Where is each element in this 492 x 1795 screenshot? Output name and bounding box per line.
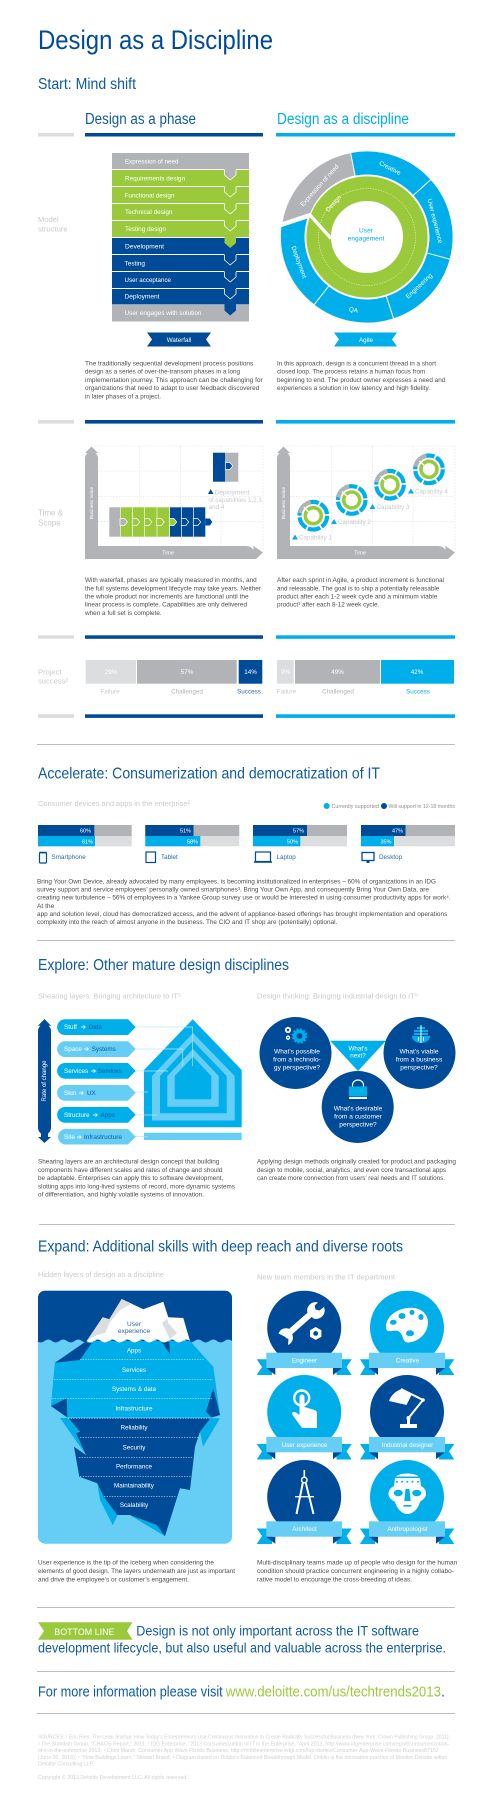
rate of change arrow bbox=[38, 1019, 51, 1143]
copyright: Copyright © 2013 Deloitte Development LLC. All rights reserved. bbox=[38, 1774, 188, 1781]
text: design thinking description bbox=[257, 1159, 456, 1182]
agile donut diagram bbox=[280, 151, 453, 323]
badge: user experience: User experience bbox=[282, 1442, 328, 1449]
rate of change arrow: Rate of change bbox=[41, 1060, 48, 1102]
iceberg panel: Maintainability bbox=[114, 1482, 155, 1490]
sources: SOURCES: ¹ Eric Ries, The Lean Startup: How Today's Entrepreneurs Use Continuous Innovation to Create Radically Successful Business (New York: Crown Publishing Group, 2011); bbox=[38, 1735, 450, 1741]
icon: smartphone bbox=[40, 852, 46, 863]
waterfall diagram bbox=[112, 153, 249, 322]
bar chart: desktop bbox=[361, 825, 455, 846]
call to action: For more information please visit bbox=[38, 1685, 223, 1701]
waterfall diagram: User acceptance bbox=[124, 277, 171, 284]
badge: industrial designer bbox=[360, 1375, 454, 1460]
badge: creative bbox=[360, 1291, 454, 1375]
text: waterfall description bbox=[85, 360, 263, 400]
chart: waterfall time and scope bbox=[85, 446, 264, 559]
agile donut diagram: Deployment bbox=[289, 245, 308, 279]
ribbon: waterfall bbox=[147, 332, 211, 346]
subheading: hidden layers: Hidden layers of design as a discipline bbox=[38, 1270, 164, 1279]
waterfall diagram: Deployment bbox=[124, 294, 160, 300]
layer tag: skin to ux bbox=[57, 1085, 136, 1101]
divider bars bbox=[38, 635, 455, 639]
text: design thinking description: design to mobile, social, analytics, and even core transactional apps bbox=[257, 1167, 447, 1174]
icon: desk lamp bbox=[389, 1389, 425, 1428]
layer tag: services to services bbox=[57, 1063, 136, 1079]
ribbon: agile bbox=[334, 332, 397, 346]
label: desktop: Desktop bbox=[379, 854, 403, 861]
text: consumerization paragraph: complexity into the reach of almost anyone in the business. The CIO and IT shop are (potentially) optional. bbox=[37, 919, 337, 926]
text: teams description bbox=[257, 1560, 458, 1583]
layer tag: structure to apps: Apps bbox=[100, 1112, 115, 1119]
text: waterfall description: design as a series of over-the-transom phases in a long bbox=[85, 369, 240, 376]
title: Design as a Discipline bbox=[38, 25, 273, 55]
chart: agile time and scope: Business value bbox=[281, 487, 287, 519]
bar chart: agile project success: Challenged bbox=[322, 688, 354, 696]
text: waterfall timing description: when a full set is complete. bbox=[84, 610, 162, 617]
bottom line ribbon bbox=[38, 1622, 132, 1640]
chart: agile time and scope: Capability 2 bbox=[338, 519, 371, 526]
iceberg panel: Performance bbox=[116, 1463, 153, 1470]
design thinking diagram bbox=[260, 1017, 456, 1143]
bar chart: smartphone bbox=[38, 825, 132, 846]
text: shearing layers description: of differentiation, and highly volatile systems of innovation. bbox=[38, 1192, 204, 1199]
bar chart: agile project success: 9% bbox=[281, 669, 290, 676]
circle: business perspective: What's viable bbox=[399, 1048, 439, 1056]
layer tag: stuff to data bbox=[57, 1019, 136, 1035]
icon: drafting compass bbox=[295, 1470, 314, 1514]
bar chart: smartphone: 60% bbox=[80, 828, 91, 834]
circle: technology perspective: gy perspective? bbox=[274, 1064, 320, 1072]
badge: user experience bbox=[257, 1375, 352, 1460]
section heading: start: Start: Mind shift bbox=[38, 76, 136, 93]
layer tag: skin to ux: UX bbox=[87, 1090, 97, 1097]
waterfall diagram: Testing design bbox=[125, 226, 166, 233]
agile donut diagram: Expression of need bbox=[299, 163, 341, 208]
section heading: explore: Explore: Other mature design disciplines bbox=[38, 957, 289, 974]
agile donut diagram: Design bbox=[325, 194, 343, 213]
text: agile description bbox=[277, 360, 446, 392]
bar chart: desktop: 35% bbox=[380, 839, 392, 845]
text: consumerization paragraph: At the bbox=[37, 903, 55, 910]
iceberg panel: Reliability bbox=[121, 1425, 148, 1432]
layer tag: structure to apps bbox=[57, 1107, 136, 1123]
bar chart: tablet: 51% bbox=[180, 828, 191, 834]
row label: project success: Project bbox=[38, 668, 63, 676]
text: agile description: beginning to end. The product owner expresses a need and bbox=[277, 377, 446, 384]
circle: business perspective: perspective? bbox=[400, 1064, 438, 1072]
iceberg panel: Services bbox=[122, 1367, 146, 1374]
badge: anthropologist bbox=[360, 1460, 454, 1544]
icon: desktop bbox=[362, 852, 374, 863]
triangle: what's next: next? bbox=[350, 1052, 366, 1060]
text: waterfall description: in later phases of a project. bbox=[85, 394, 161, 400]
text: design thinking description: can create more connection from users’ real needs and IT solutions. bbox=[257, 1175, 445, 1182]
bar chart: smartphone: 61% bbox=[82, 839, 93, 845]
chart: waterfall time and scope: Time bbox=[162, 551, 174, 557]
text: design thinking description: Applying design methods originally created for product and packaging bbox=[257, 1159, 456, 1166]
bar chart: desktop: 47% bbox=[392, 828, 403, 834]
text: consumerization paragraph bbox=[37, 878, 451, 926]
layer tag: space to systems bbox=[57, 1041, 136, 1057]
waterfall diagram: Functional design bbox=[124, 192, 175, 200]
section heading: accelerate: Accelerate: Consumerization and democratization of IT bbox=[38, 766, 380, 783]
text: iceberg description: and drive the employee’s or customer’s engagement. bbox=[38, 1576, 189, 1583]
circle: customer perspective bbox=[322, 1071, 394, 1143]
text: waterfall timing description: the full systems development lifecycle may take years. Neither bbox=[85, 585, 262, 592]
agile donut diagram: User experience bbox=[426, 198, 444, 245]
badge: architect bbox=[257, 1460, 352, 1544]
row label: time and scope: Time & bbox=[38, 508, 64, 518]
text: agile timing description: After each sprint in Agile, a product increment is functional bbox=[277, 577, 445, 584]
text: waterfall description: implementation journey. This approach can be challenging for bbox=[85, 377, 263, 384]
bar chart: waterfall project success: Success bbox=[237, 688, 261, 696]
text: waterfall description: organizations that need to adapt to user feedback discovered bbox=[85, 385, 260, 392]
bar chart: agile project success bbox=[277, 660, 454, 696]
icon: laptop bbox=[254, 852, 272, 863]
bar chart: laptop bbox=[253, 825, 347, 846]
text: consumerization paragraph: creating new turbulence – 56% of employees in a Yankee Group survey use or would be interested in using consumer productivity apps for work⁴. bbox=[37, 895, 451, 902]
circle: customer perspective: perspective? bbox=[339, 1122, 377, 1129]
call to action bbox=[38, 1685, 445, 1701]
icon: touch hand bbox=[292, 1390, 317, 1428]
circle: technology perspective bbox=[260, 1017, 332, 1089]
text: iceberg description: User experience is the tip of the iceberg when considering the bbox=[38, 1560, 214, 1567]
badge: engineer bbox=[257, 1291, 352, 1375]
ribbon: waterfall: Waterfall bbox=[167, 337, 191, 344]
chart: agile time and scope: Capability 4 bbox=[415, 488, 448, 496]
text: shearing layers description: Shearing layers are an architectural design concept that building bbox=[38, 1159, 220, 1166]
subheading: consumer devices: Consumer devices and apps in the enterprise² bbox=[38, 799, 190, 808]
icon: mask bbox=[388, 1474, 426, 1514]
text: waterfall timing description: the whole product nor increments are functional until the bbox=[85, 594, 249, 600]
waterfall diagram: User engages with solution bbox=[124, 310, 202, 317]
ribbon: agile: Agile bbox=[359, 337, 373, 344]
agile donut diagram: Engineering bbox=[405, 272, 434, 300]
iceberg panel: Infrastructure bbox=[115, 1406, 153, 1413]
sources bbox=[38, 1735, 450, 1768]
label: smartphone: Smartphone bbox=[52, 854, 86, 861]
layer tag: services to services: Services bbox=[98, 1068, 122, 1075]
waterfall diagram: Development bbox=[125, 244, 164, 250]
row label: project success: success² bbox=[38, 676, 68, 686]
legend bbox=[324, 803, 455, 810]
iceberg panel: Apps bbox=[127, 1347, 141, 1354]
bar chart: agile project success: 42% bbox=[411, 669, 424, 676]
bar chart: tablet bbox=[145, 825, 239, 846]
icon: palette bbox=[386, 1308, 428, 1342]
agile donut diagram: QA bbox=[348, 306, 359, 315]
badge: anthropologist: Anthropologist bbox=[387, 1526, 428, 1533]
layer tag: stuff to data: Data bbox=[89, 1024, 102, 1031]
text: teams description: rative model to encourage the cross-breeding of ideas. bbox=[257, 1576, 412, 1583]
text: waterfall timing description bbox=[84, 577, 262, 617]
bar chart: agile project success: 49% bbox=[331, 669, 344, 676]
chart: waterfall time and scope: and 4 bbox=[208, 504, 225, 511]
legend: Currently supported bbox=[332, 804, 379, 810]
text: teams description: Multi-disciplinary teams made up of people who design for the human bbox=[257, 1560, 458, 1567]
chart: agile time and scope: Capability 3 bbox=[376, 504, 410, 511]
label: tablet: Tablet bbox=[161, 854, 178, 861]
text: agile timing description: product after each 1-2 week cycle and a minimum viable bbox=[277, 594, 438, 600]
waterfall diagram: Expression of need bbox=[125, 158, 179, 166]
bottom line statement bbox=[38, 1623, 446, 1656]
layer tag: space to systems: Systems bbox=[92, 1046, 116, 1053]
text: agile description: closed loop. The process retains a human focus from bbox=[277, 369, 426, 376]
text: agile description: In this approach, design is a concurrent thread in a short bbox=[277, 360, 436, 367]
waterfall diagram: Testing bbox=[124, 260, 146, 268]
iceberg panel: Systems & data bbox=[112, 1386, 157, 1393]
bar chart: agile project success: Failure bbox=[277, 688, 297, 696]
layer tag: stuff to data: Stuff bbox=[64, 1024, 77, 1031]
subheading: new team members: New team members in the IT department bbox=[257, 1273, 396, 1282]
circle: technology perspective: What's possible bbox=[274, 1048, 320, 1056]
bar chart: waterfall project success: 57% bbox=[181, 669, 194, 676]
icon: tablet bbox=[146, 852, 156, 862]
text: consumerization paragraph: survey support and service employees’ personally owned smartphones³. Bring Your Own App, and consequently Bring Your Own Data, are bbox=[37, 887, 429, 894]
text: agile timing description bbox=[277, 577, 445, 609]
divider bars bbox=[38, 714, 455, 718]
subheading: shearing layers: Shearing layers: Bringing architecture to IT⁵ bbox=[38, 992, 181, 1001]
call to action: . bbox=[441, 1685, 445, 1701]
triangle: what's next bbox=[330, 1041, 386, 1071]
text: teams description: condition should practice concurrent engineering in a highly collabo- bbox=[257, 1568, 454, 1575]
iceberg panel: experience bbox=[118, 1328, 150, 1335]
chart: waterfall time and scope: of capabilities 1,2,3, bbox=[208, 497, 264, 504]
column heading: design as a phase: Design as a phase bbox=[85, 111, 196, 128]
iceberg panel: Scalability bbox=[120, 1502, 149, 1509]
text: shearing layers description bbox=[38, 1159, 236, 1199]
text: agile description: experiences a solution in low latency and high fidelity. bbox=[277, 385, 430, 392]
header bars bbox=[38, 133, 455, 136]
chart: agile time and scope: Capability 1 bbox=[299, 534, 332, 542]
text: waterfall timing description: With waterfall, phases are typically measured in months, and bbox=[85, 577, 257, 584]
badge: engineer: Engineer bbox=[292, 1358, 317, 1364]
divider bars bbox=[38, 420, 455, 424]
text: shearing layers description: be adaptable. Enterprises can apply this to software development, bbox=[38, 1175, 223, 1182]
text: waterfall timing description: linear process is complete. Capabilities are only delivered bbox=[85, 602, 247, 609]
circle: customer perspective: What's desirable bbox=[334, 1106, 383, 1113]
subheading: design thinking: Design thinking: Bringing industrial design to IT⁶ bbox=[257, 992, 418, 1001]
bar chart: agile project success: Success bbox=[406, 688, 430, 696]
badge: industrial designer: Industrial designer bbox=[382, 1442, 433, 1449]
agile donut diagram: User bbox=[359, 228, 374, 234]
iceberg panel: User bbox=[127, 1321, 142, 1328]
legend: Will support in 12-18 months bbox=[388, 804, 455, 810]
circle: business perspective bbox=[384, 1017, 456, 1089]
row label: time and scope: Scope bbox=[38, 518, 61, 528]
row label: model structure: structure bbox=[38, 224, 68, 234]
text: consumerization paragraph: Bring Your Own Device, already advocated by many employees, is becoming institutionalized in enterprises – 60% of organizations in an IDG bbox=[37, 878, 436, 885]
layer tag: structure to apps: Structure bbox=[64, 1112, 90, 1119]
iceberg panel: Security bbox=[123, 1444, 146, 1451]
text: iceberg description bbox=[38, 1560, 235, 1583]
shearing layers house diagram bbox=[135, 1019, 242, 1140]
bar chart: laptop: 50% bbox=[287, 839, 298, 845]
badge: creative: Creative bbox=[396, 1358, 420, 1364]
agile donut diagram: Creative bbox=[378, 160, 402, 177]
circle: business perspective: from a business bbox=[396, 1056, 443, 1064]
iceberg underwater body bbox=[51, 1341, 220, 1536]
agile donut diagram: engagement bbox=[348, 236, 384, 242]
section heading: expand: Expand: Additional skills with deep reach and diverse roots bbox=[38, 1239, 403, 1256]
text: iceberg description: elements of good design. The layers underneath are just as important bbox=[38, 1568, 235, 1575]
text: waterfall description: The traditionally sequential development process positions bbox=[85, 360, 254, 367]
label: laptop: Laptop bbox=[276, 854, 296, 861]
layer tag: site to infrastructure: Infrastructure bbox=[84, 1134, 122, 1141]
chart: waterfall time and scope: Business value bbox=[89, 487, 95, 519]
waterfall diagram: Requirements design bbox=[125, 176, 185, 182]
bar chart: tablet: 58% bbox=[187, 839, 198, 845]
bottom line ribbon: BOTTOM LINE bbox=[54, 1627, 114, 1638]
row label: model structure bbox=[38, 215, 68, 234]
sources: (June 30, 2013); ⁵ "How Buildings Learn," Stewart Brand; ⁶ Diagram based on Doblin's Balanced Breakthrough Model. Doblin is the innovation practice of Monitor Deloitte within bbox=[38, 1755, 448, 1761]
text: shearing layers description: slotting apps into long-lived systems of record, more dynamic systems bbox=[38, 1183, 236, 1190]
sources: Deloitte Consulting LLP. bbox=[38, 1762, 94, 1768]
text: shearing layers description: components have different scales and rates of change and should bbox=[38, 1167, 223, 1174]
text: agile timing description: product¹ after each 8-12 week cycle. bbox=[277, 602, 379, 609]
circle: customer perspective: from a customer bbox=[334, 1114, 383, 1121]
iceberg tip bbox=[86, 1299, 190, 1342]
triangle: what's next: What's bbox=[348, 1046, 368, 1052]
column heading: design as a discipline: Design as a discipline bbox=[277, 111, 409, 128]
bar chart: waterfall project success: 14% bbox=[244, 669, 257, 676]
chart: agile time and scope: Time bbox=[354, 551, 366, 557]
row label: time and scope bbox=[38, 508, 64, 528]
row label: model structure: Model bbox=[38, 215, 59, 224]
layer tag: skin to ux: Skin bbox=[64, 1090, 77, 1097]
badge: architect: Architect bbox=[292, 1526, 317, 1533]
bar chart: waterfall project success: 29% bbox=[105, 669, 118, 676]
layer tag: site to infrastructure bbox=[58, 1129, 136, 1144]
chart: agile time and scope bbox=[277, 446, 455, 559]
layer tag: services to services: Services bbox=[64, 1068, 88, 1075]
bar chart: waterfall project success bbox=[86, 660, 262, 696]
bottom line statement: Design is not only important across the IT software bbox=[136, 1623, 419, 1639]
layer tag: site to infrastructure: Site bbox=[64, 1134, 75, 1141]
bar chart: waterfall project success: Failure bbox=[100, 688, 120, 696]
iceberg panel bbox=[37, 1291, 232, 1544]
waterfall diagram: Technical design bbox=[125, 209, 173, 216]
text: agile timing description: and releasable. The goal is to ship a potentially releasable bbox=[277, 585, 440, 592]
call to action: www.deloitte.com/us/techtrends2013 bbox=[225, 1685, 441, 1701]
text: consumerization paragraph: app and solution level, cloud has democratized access, and the advent of appliance-based offerings has brought implementation and operations bbox=[37, 911, 448, 918]
chart: waterfall time and scope: Deployment bbox=[214, 490, 250, 496]
circle: technology perspective: from a technolo- bbox=[273, 1056, 321, 1064]
sources: of-it-in-the-enterprise-2013; ⁴ Chris Marsh: Consumer App Wave Floods Business; http://mobileenterprise.edgl.com/top-stories/Consumer-App-Wave-Floods-Business87152 bbox=[38, 1748, 439, 1754]
bar chart: waterfall project success: Challenged bbox=[171, 688, 203, 696]
icon: wrench and nut bbox=[278, 1302, 325, 1345]
sources: ² The Standish Group, "CHAOS Report," 2011; ³ IDG Enterprise, "2013 Consumerization of IT in the Enterprise," April 2013, http://www.idgenterprise.com/report/consumerization- bbox=[38, 1741, 450, 1747]
row label: project success bbox=[38, 668, 68, 686]
bottom line statement: development lifecycle, but also useful and valuable across the enterprise. bbox=[38, 1640, 446, 1656]
bar chart: laptop: 57% bbox=[293, 828, 304, 834]
layer tag: space to systems: Space bbox=[64, 1046, 82, 1053]
